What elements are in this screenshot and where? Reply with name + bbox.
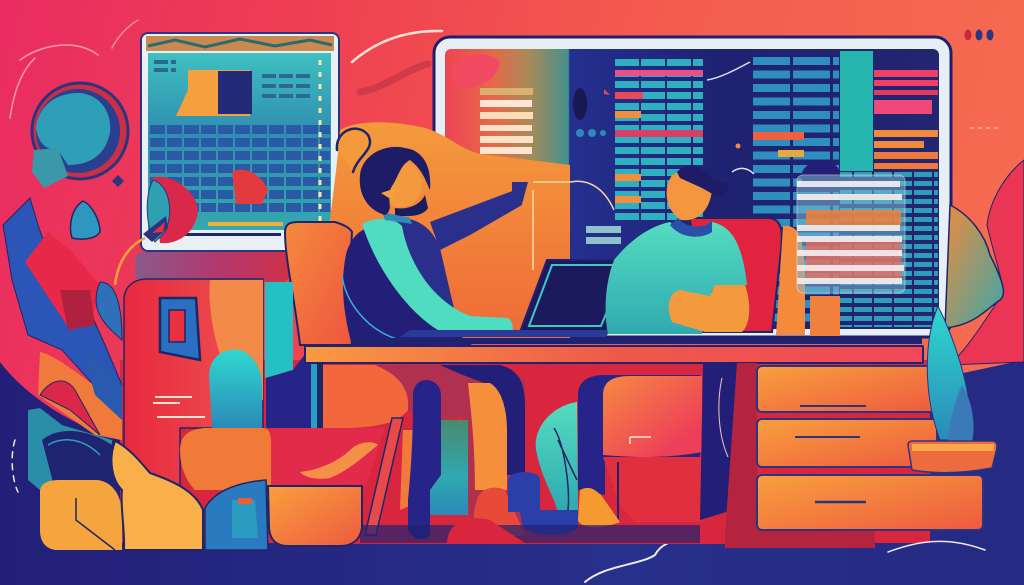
- navy chair body: [343, 225, 472, 345]
- table leg: [311, 362, 317, 428]
- person behind card: head: [802, 160, 840, 185]
- pointer line on screen: [533, 181, 614, 270]
- torso: [606, 222, 747, 334]
- pot: [268, 486, 362, 546]
- navy left leg: [440, 365, 525, 475]
- orange left leg: [468, 383, 507, 490]
- arm: [430, 190, 522, 250]
- drawer 1: [757, 366, 937, 412]
- navy right leg: [578, 375, 700, 495]
- laptop: [400, 260, 633, 337]
- center under-desk area: [311, 362, 752, 544]
- red blob on screen: [452, 54, 500, 88]
- question mark icon: [337, 129, 370, 172]
- navy panel: [266, 345, 312, 428]
- left shoe blobs: [474, 488, 525, 540]
- red shelf: [271, 428, 385, 486]
- blue pot: [205, 480, 268, 550]
- beard: [395, 195, 428, 216]
- neck: [670, 218, 712, 237]
- curved stem: [115, 238, 145, 285]
- white data rows: [480, 88, 533, 154]
- right drawers: [725, 363, 983, 548]
- navy torso: [385, 217, 460, 330]
- teal right leg: [536, 402, 578, 510]
- drawer 2: [757, 419, 937, 467]
- right leaf cluster: [945, 160, 1024, 365]
- teal and navy lower leaf: [28, 408, 112, 490]
- chart block on left monitor: [154, 62, 310, 116]
- right monitor: [434, 37, 951, 337]
- stool: [408, 380, 441, 539]
- lower left pots and shapes: [40, 428, 385, 550]
- red diamond leaf: [25, 232, 100, 330]
- small framed device: [160, 298, 200, 360]
- person right: [606, 166, 749, 334]
- round gauge icon: [32, 83, 128, 188]
- orange shoe: [578, 488, 620, 527]
- left yellow pot: [40, 480, 122, 550]
- teal sleeve: [362, 219, 513, 336]
- teal blob: [209, 350, 262, 428]
- arm and hand: [669, 285, 749, 332]
- leaf motif: [300, 442, 378, 479]
- right chair back: [690, 218, 840, 336]
- small teal leaf: [70, 201, 100, 239]
- head: [667, 173, 712, 220]
- navy column: [700, 363, 737, 520]
- yellow cat-shaped plant: [111, 441, 203, 550]
- left monitor: [141, 33, 339, 251]
- translucent note card: [797, 175, 905, 293]
- head: [382, 162, 422, 207]
- orange cloud behind people: [325, 122, 570, 340]
- teal panel: [265, 282, 293, 378]
- blue lower leaf: [80, 340, 122, 420]
- orange cushion: [180, 428, 271, 490]
- gradient area: [430, 420, 468, 515]
- desk top: [305, 341, 923, 363]
- drawer 3: [757, 475, 983, 530]
- blue shoe: [508, 472, 578, 535]
- left data table: [586, 59, 703, 244]
- hair: [360, 147, 430, 215]
- orange blob: [322, 365, 408, 428]
- side leaf: [96, 282, 122, 340]
- cabinet band below left monitor: [135, 252, 290, 282]
- hair and cap: [677, 166, 728, 196]
- chair struts: [365, 418, 403, 535]
- left plant leaves: [3, 198, 145, 490]
- orange leaf: [38, 352, 122, 440]
- bar glyph on screen: [573, 88, 610, 137]
- person left with pointing arm: [342, 147, 528, 345]
- left cabinet: [124, 279, 312, 490]
- seat: [603, 376, 702, 457]
- three dots, top right: [964, 30, 994, 40]
- left chair: [285, 222, 352, 345]
- blue leaf: [3, 198, 122, 392]
- potted plant right: [908, 306, 997, 473]
- floor shadow: [360, 525, 700, 543]
- right data table: [753, 51, 938, 327]
